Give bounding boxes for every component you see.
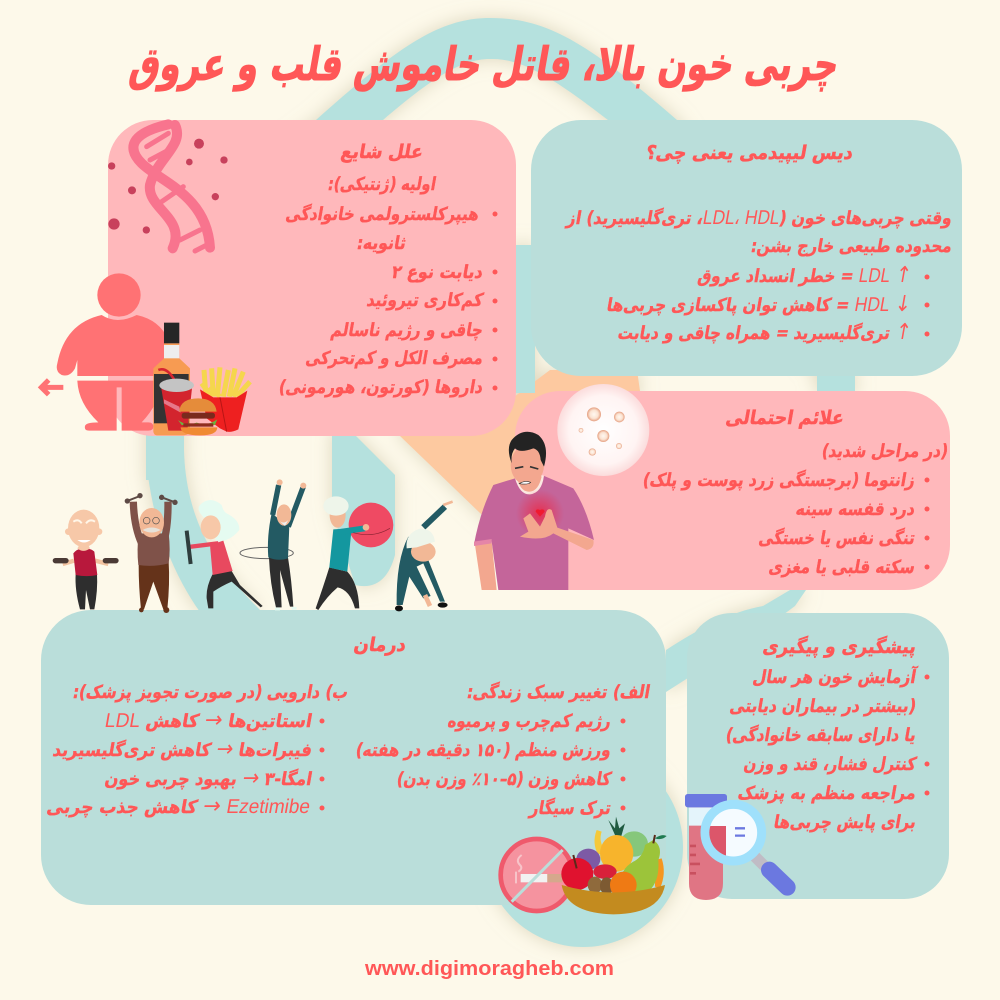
icon: xanthoma bubble xyxy=(557,384,649,476)
heading: what is dyslipidemia: دیس لیپیدمی یعنی چی؟ xyxy=(644,141,855,164)
burger xyxy=(179,398,217,412)
text block: symptoms list: تنگی نفس یا خستگی xyxy=(757,527,917,549)
column: lifestyle change: کاهش وزن (۵–۱۰٪ وزن بدن) xyxy=(395,769,613,790)
text block: prevention list: کنترل فشار، قند و وزن xyxy=(742,754,918,775)
panel: prevention and follow-up xyxy=(685,613,949,900)
panel: common causes xyxy=(41,120,516,436)
icon: overweight figure xyxy=(41,273,168,431)
text block: symptoms list: (در مراحل شدید) xyxy=(820,441,950,462)
text block: causes list: داروها (کورتون، هورمونی) xyxy=(277,377,485,398)
icon: no smoking xyxy=(501,839,573,911)
text block: causes list: ثانویه: xyxy=(355,233,408,254)
heading: common causes: علل شایع xyxy=(339,140,425,163)
list: lipid changes: ↓ HDL = کاهش توان پاکسازی چربی‌ها xyxy=(605,291,913,317)
list: lipid changes xyxy=(605,262,930,345)
column: medication: Ezetimibe → کاهش جذب چربی xyxy=(45,793,312,819)
text block: causes list: مصرف الکل و کم‌تحرکی xyxy=(304,348,485,369)
heading: treatment: درمان xyxy=(352,633,408,656)
text block: prevention list: برای پایش چربی‌ها xyxy=(772,812,918,833)
text block: symptoms list: درد قفسه سینه xyxy=(794,499,917,520)
illustration: elderly people exercising xyxy=(55,479,453,613)
text block: symptoms list xyxy=(641,441,950,578)
column: lifestyle change: الف) تغییر سبک زندگی: xyxy=(465,681,652,703)
text block: causes list: چاقی و رژیم ناسالم xyxy=(329,320,485,341)
column: medication: استاتین‌ها → کاهش LDL xyxy=(103,707,314,733)
heading: prevention: پیشگیری و پیگیری xyxy=(761,635,918,658)
figure 6: man bending xyxy=(395,502,453,611)
figure 2: man lifting weights xyxy=(125,493,178,613)
heading: possible symptoms: علائم احتمالی xyxy=(724,406,846,429)
text block: causes list xyxy=(277,174,498,398)
text block: causes list: اولیه (ژنتیکی): xyxy=(326,174,438,195)
text block: causes list: هیپرکلسترولمی خانوادگی xyxy=(284,203,481,225)
column: lifestyle change: ورزش منظم (۱۵۰ دقیقه در هفته) xyxy=(354,740,613,761)
text block: prevention list: مراجعه منظم به پزشک xyxy=(736,783,918,804)
figure 3: woman with stick xyxy=(187,500,263,608)
panel: what is dyslipidemia xyxy=(531,120,962,376)
fries xyxy=(202,367,250,397)
cup xyxy=(161,388,192,431)
text block: symptoms list: زانتوما (برجستگی زرد پوست و پلک) xyxy=(641,469,917,491)
icon: test tube and magnifier xyxy=(685,794,787,900)
text block: causes list: دیابت نوع ۲ xyxy=(390,262,485,283)
icon: fruit basket xyxy=(561,817,667,914)
text block: definition: وقتی چربی‌های خون (LDL، HDL، تری‌گلیسیرید) از xyxy=(564,207,954,229)
bottle xyxy=(153,343,190,435)
panel: possible symptoms xyxy=(474,384,950,590)
panel: treatment xyxy=(41,610,667,914)
figure 1: man with dumbbells xyxy=(55,510,116,609)
figure 5: woman with exercise ball xyxy=(316,496,393,610)
column: lifestyle change xyxy=(354,681,652,819)
text block: prevention list xyxy=(724,665,930,833)
text block: prevention list: یا دارای سابقه خانوادگی) xyxy=(724,724,918,746)
list: lipid changes: ↑ تری‌گلیسیرید = همراه چاقی و دیابت xyxy=(616,319,913,345)
column: medication xyxy=(45,682,350,819)
icon: dna helix xyxy=(108,124,228,251)
website url: www.digimoragheb.com xyxy=(364,958,614,980)
text block: symptoms list: سکته قلبی یا مغزی xyxy=(767,557,917,578)
text block: prevention list: (بیشتر در بیماران دیابتی xyxy=(728,696,918,717)
icon: man with chest pain xyxy=(474,432,594,590)
column: medication: امگا-۳ → بهبود چربی خون xyxy=(103,765,314,791)
figure 4: man with hula hoop xyxy=(240,479,306,609)
text block: definition xyxy=(564,207,954,257)
icon: junk food xyxy=(153,323,250,435)
column: medication: فیبرات‌ها → کاهش تری‌گلیسیرید xyxy=(51,736,314,762)
text block: definition: محدوده طبیعی خارج بشن: xyxy=(749,236,954,257)
list: lipid changes: ↑ LDL = خطر انسداد عروق xyxy=(696,262,913,288)
text block: causes list: کم‌کاری تیروئید xyxy=(365,290,485,311)
column: medication: ب) دارویی (در صورت تجویز پزشک): xyxy=(71,682,350,703)
text block: prevention list: آزمایش خون هر سال xyxy=(751,665,919,688)
column: lifestyle change: رژیم کم‌چرب و پرمیوه xyxy=(446,711,613,732)
column: lifestyle change: ترک سیگار xyxy=(527,797,613,819)
